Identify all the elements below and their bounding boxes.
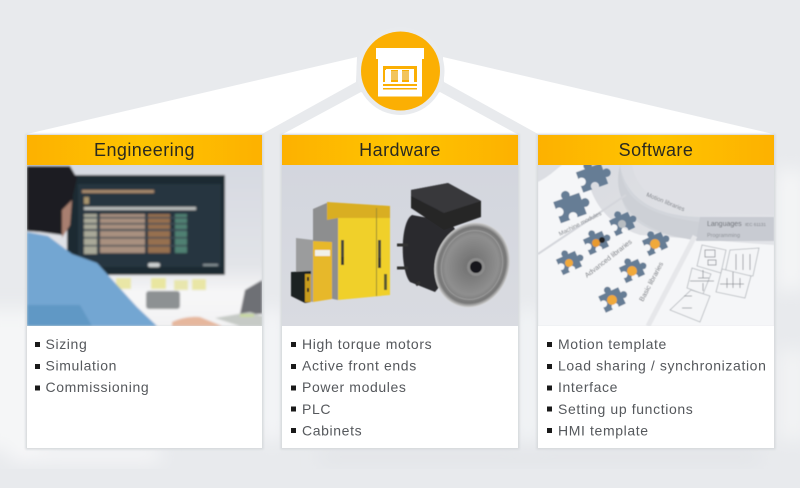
panel: Engineering xyxy=(26,134,264,450)
Hardware photo: drives and motor xyxy=(290,182,510,307)
Hardware bullet list: Cabinets xyxy=(302,422,362,438)
Engineering bullet list xyxy=(35,336,149,395)
Software white list card xyxy=(538,326,774,448)
Software bullet list: Interface xyxy=(558,379,618,395)
panel: Software xyxy=(536,134,776,450)
Hardware white list card xyxy=(282,326,518,448)
Software diagram: libraries and languages xyxy=(538,155,774,326)
Engineering bullet list: Simulation xyxy=(46,358,117,374)
Engineering bullet list: Commissioning xyxy=(46,379,149,395)
Software diagram: libraries and languages: Advanced libraries xyxy=(584,238,634,280)
Software bullet list: HMI template xyxy=(558,422,649,438)
Software diagram: libraries and languages: Motion libraries xyxy=(645,192,685,213)
Hardware heading: Hardware xyxy=(359,140,441,160)
Software heading: Software xyxy=(619,140,693,160)
Software diagram: libraries and languages: Programming xyxy=(707,233,740,239)
diagram labels: Machine modules xyxy=(558,211,603,238)
Software diagram: libraries and languages: Basic libraries xyxy=(639,261,665,303)
Engineering heading: Engineering xyxy=(94,140,195,160)
small drive xyxy=(296,238,313,302)
large drive xyxy=(313,202,338,300)
puzzle pieces xyxy=(552,190,590,224)
Hardware heading xyxy=(282,135,518,165)
Engineering heading xyxy=(27,135,262,165)
Software bullet list: Motion template xyxy=(558,336,667,352)
roof: right section xyxy=(443,57,773,134)
Software bullet list xyxy=(547,336,766,438)
Software diagram: libraries and languages: IEC 61131 xyxy=(745,222,766,227)
panel: Hardware xyxy=(280,134,521,450)
Hardware bullet list: Power modules xyxy=(302,379,407,395)
Software heading xyxy=(538,135,774,165)
language tiles xyxy=(670,245,759,322)
Hardware bullet list: PLC xyxy=(302,401,331,417)
Software bullet list: Load sharing / synchronization xyxy=(558,358,766,374)
roof: centre section xyxy=(283,92,517,134)
roof: left section xyxy=(27,57,357,134)
Engineering photo: person at monitor xyxy=(27,165,262,326)
Hardware bullet list: High torque motors xyxy=(302,336,432,352)
Hardware bullet list: Active front ends xyxy=(302,358,417,374)
Engineering white list card xyxy=(27,326,262,448)
Software diagram: libraries and languages: Languages xyxy=(707,221,742,228)
motor xyxy=(402,214,456,293)
Hardware bullet list xyxy=(291,336,432,438)
Engineering bullet list: Sizing xyxy=(46,336,87,352)
Software bullet list: Setting up functions xyxy=(558,401,693,417)
central badge icon xyxy=(356,27,444,115)
